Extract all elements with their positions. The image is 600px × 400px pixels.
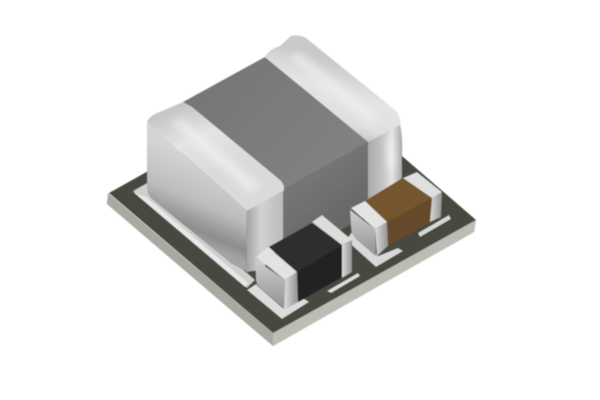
circuit board [107, 79, 476, 346]
inductor right terminal [265, 35, 402, 205]
brown capacitor [350, 172, 442, 256]
highlights on inductor terminals [170, 52, 395, 194]
brown capacitor left terminal [350, 201, 388, 256]
inductor [147, 35, 402, 272]
black capacitor right terminal [312, 215, 352, 278]
brown capacitor right terminal [403, 172, 442, 222]
inductor ferrite core [183, 57, 368, 262]
black capacitor [255, 215, 352, 310]
inductor left terminal [147, 102, 284, 272]
black capacitor left terminal [255, 247, 298, 310]
solder pads [133, 183, 451, 319]
